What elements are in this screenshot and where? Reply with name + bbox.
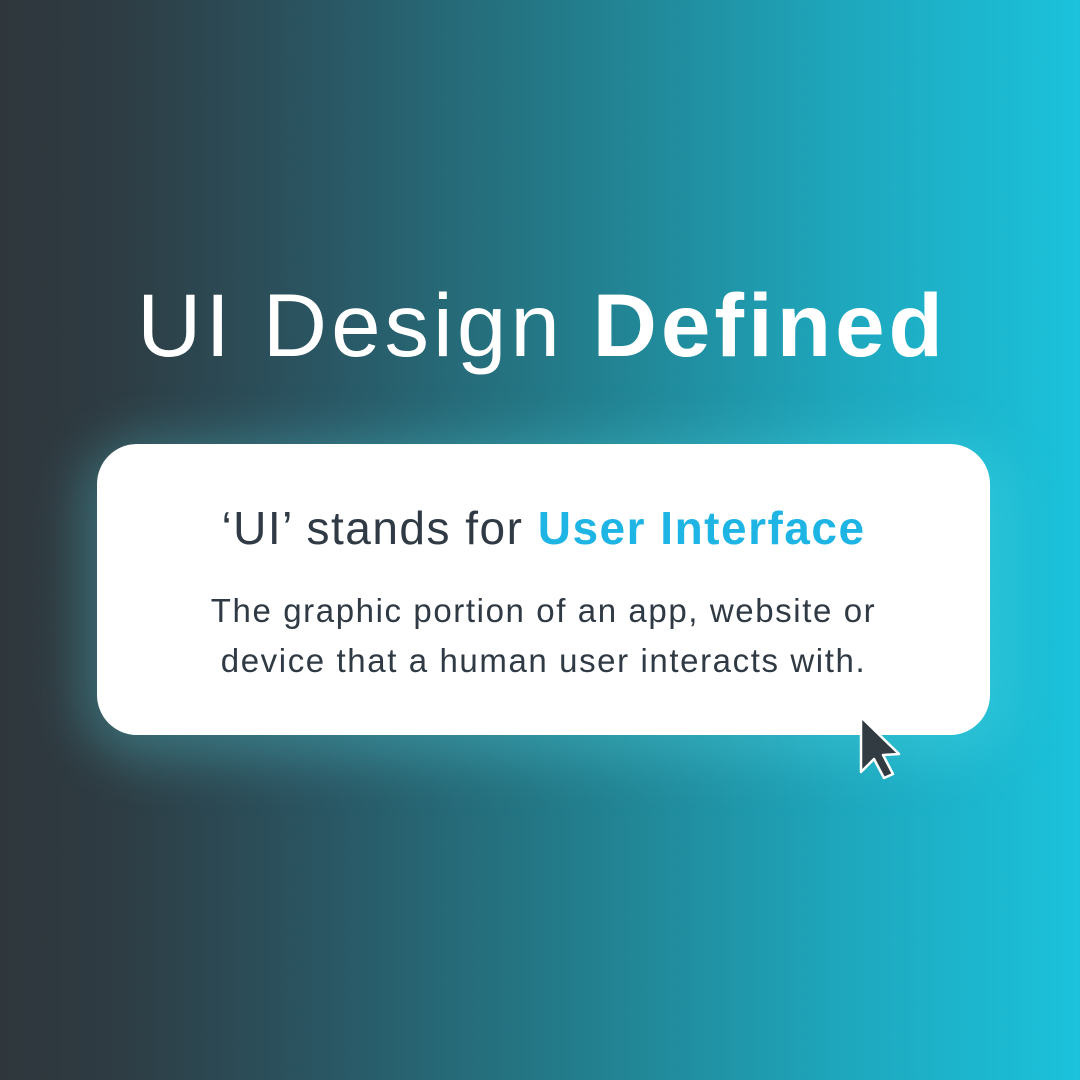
title: UI Design Defined <box>137 275 947 375</box>
icon: mouse cursor <box>860 720 900 780</box>
description text: device that a human user interacts with. <box>221 642 866 679</box>
description text: The graphic portion of an app, website or <box>211 592 876 629</box>
panel: definition card <box>97 444 990 735</box>
description text <box>211 592 876 679</box>
subheading: ‘UI’ stands for User Interface <box>221 502 866 554</box>
